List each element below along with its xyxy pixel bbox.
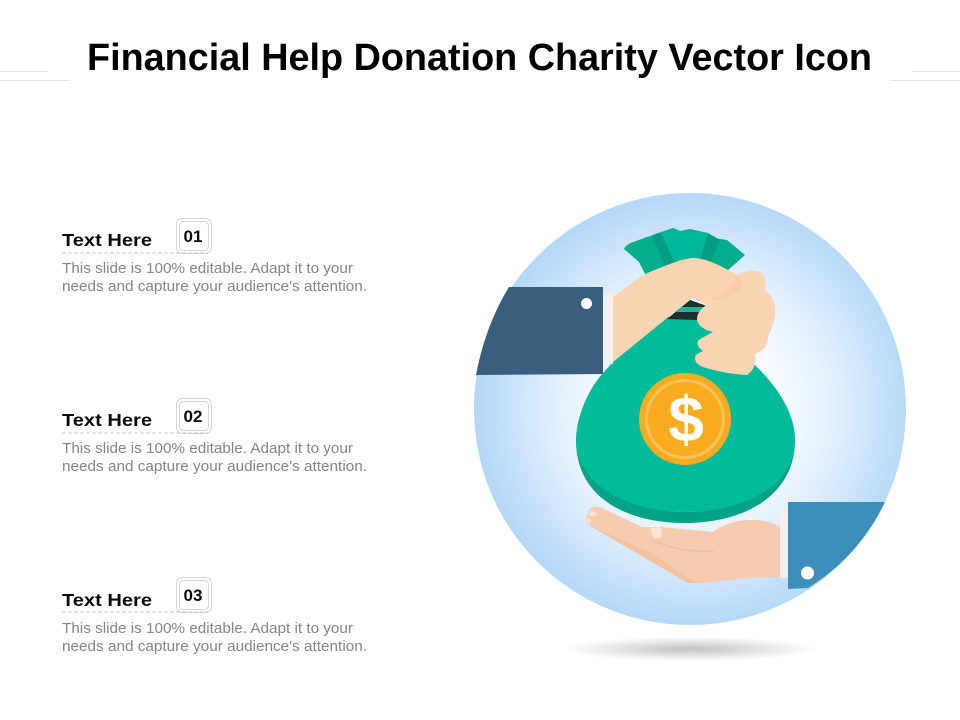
number badge 01: 01 [184, 227, 202, 246]
item 01 [62, 218, 367, 295]
background circle [474, 193, 906, 625]
body text 03: This slide is 100% editable. Adapt it to your [62, 621, 353, 637]
finger shading [592, 527, 697, 583]
body text 03: needs and capture your audience's attention. [62, 639, 367, 655]
body text 02: This slide is 100% editable. Adapt it to your [62, 441, 353, 457]
bag strap [667, 300, 707, 320]
number badge 03 [176, 578, 212, 612]
white cuff [780, 512, 788, 578]
sleeve button [801, 566, 814, 580]
dark sleeve [476, 287, 603, 375]
bag body [576, 317, 795, 512]
money bag [576, 228, 795, 523]
open palm [586, 507, 780, 583]
number badge 03: 03 [184, 586, 202, 605]
heading 01: Text Here [62, 230, 152, 250]
title: Financial Help Donation Charity Vector Icon [87, 37, 872, 79]
item 02 [62, 398, 367, 475]
number badge 02 [176, 398, 212, 434]
ground shadow [564, 637, 816, 661]
heading 03: Text Here [62, 590, 152, 610]
number badge 02: 02 [184, 407, 202, 426]
palm crease [652, 540, 714, 551]
number badge 01 [176, 218, 212, 254]
blue sleeve [788, 502, 885, 589]
body text 01: needs and capture your audience's attention. [62, 279, 367, 295]
hand holding bag [613, 258, 775, 375]
body text 01: This slide is 100% editable. Adapt it to your [62, 261, 353, 277]
header rule lines [0, 72, 960, 80]
body text 02: needs and capture your audience's attention. [62, 459, 367, 475]
dollar sign: $ [668, 383, 704, 455]
lower hand and sleeve [586, 502, 885, 589]
bag shadow rim [576, 440, 795, 523]
item 03 [62, 578, 367, 655]
heading 02: Text Here [62, 410, 152, 430]
coin [639, 373, 731, 465]
shirt cuff [603, 295, 613, 364]
bag top bunch [624, 228, 745, 274]
sleeve button [581, 298, 592, 309]
fingernails [651, 527, 662, 538]
icon: money bag exchanged between hands [474, 193, 906, 661]
upper hand and sleeve [476, 258, 775, 375]
